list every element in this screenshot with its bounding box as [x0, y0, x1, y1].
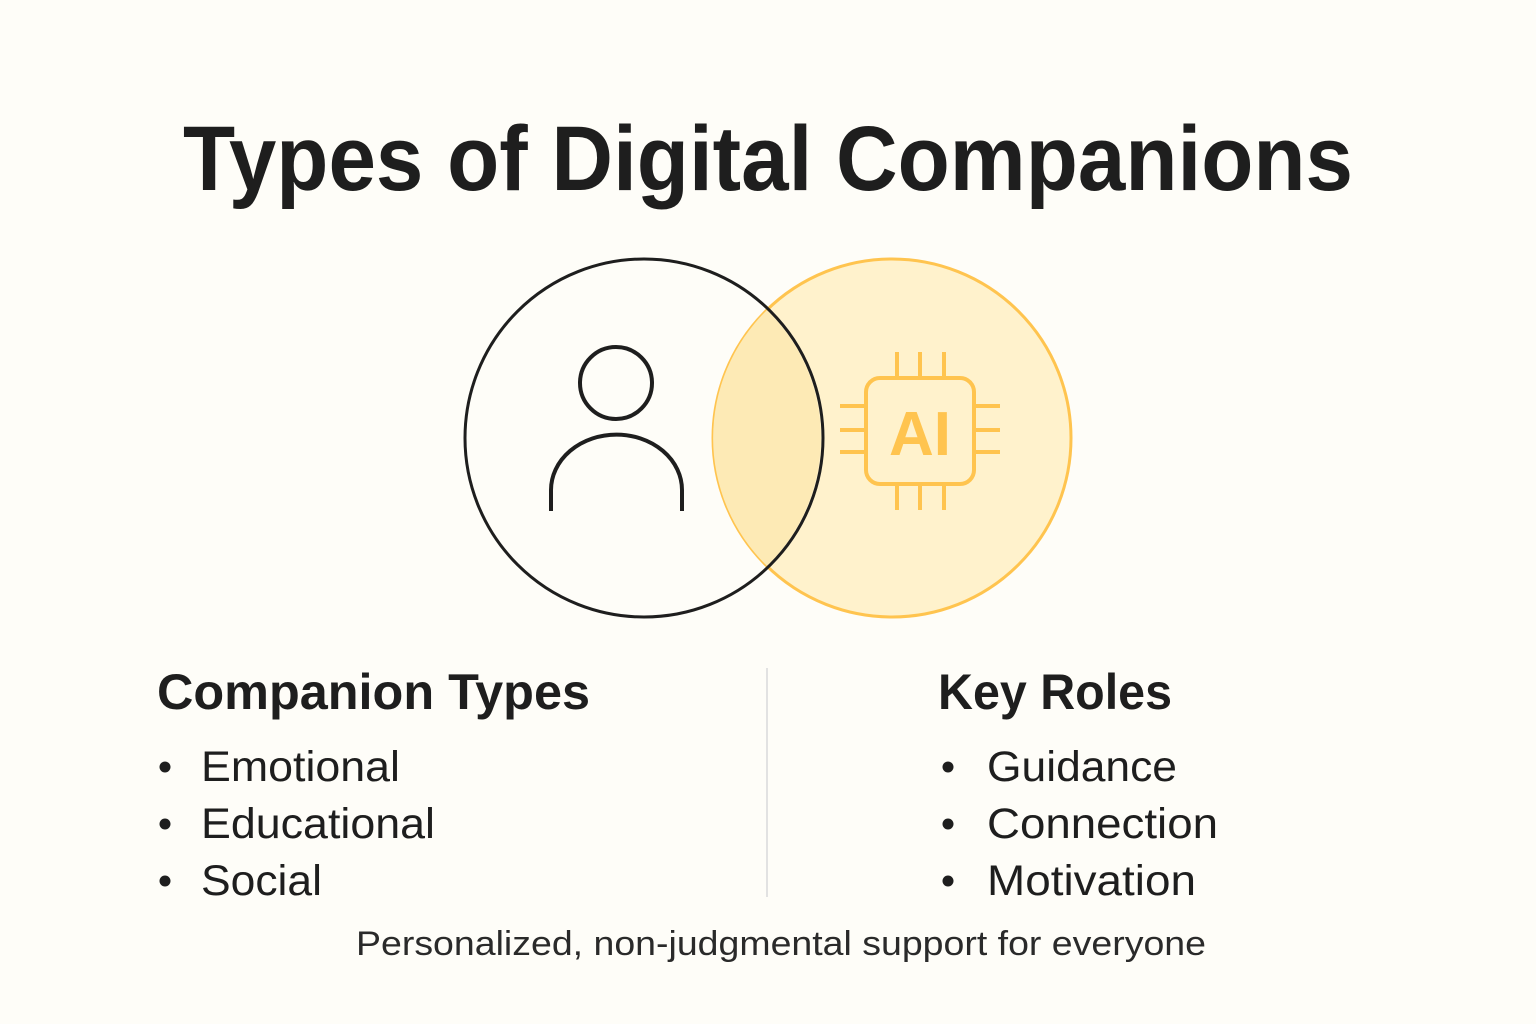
title: Types of Digital Companions [183, 108, 1353, 210]
venn diagram [465, 259, 1071, 617]
list: companion types: Educational [201, 800, 435, 848]
panel: companion types [157, 664, 590, 905]
heading: companion types: Companion Types [157, 664, 590, 720]
icon: AI chip [840, 352, 1000, 510]
list: key roles [942, 743, 1218, 905]
divider [766, 668, 768, 897]
list: key roles: Guidance [987, 743, 1177, 791]
icon: person [551, 347, 682, 511]
list: key roles: Motivation [987, 857, 1196, 905]
list: companion types [160, 743, 435, 905]
circle: AI [713, 259, 1071, 617]
panel: key roles [938, 664, 1218, 905]
list: key roles: Connection [987, 800, 1218, 848]
list: companion types: Emotional [201, 743, 400, 791]
heading: key roles: Key Roles [938, 664, 1172, 720]
overlap region [713, 310, 821, 566]
list: companion types: Social [201, 857, 322, 905]
footer tagline: Personalized, non-judgmental support for everyone [356, 925, 1206, 963]
icon: AI chip: AI [889, 400, 951, 469]
circle: human [465, 259, 823, 617]
